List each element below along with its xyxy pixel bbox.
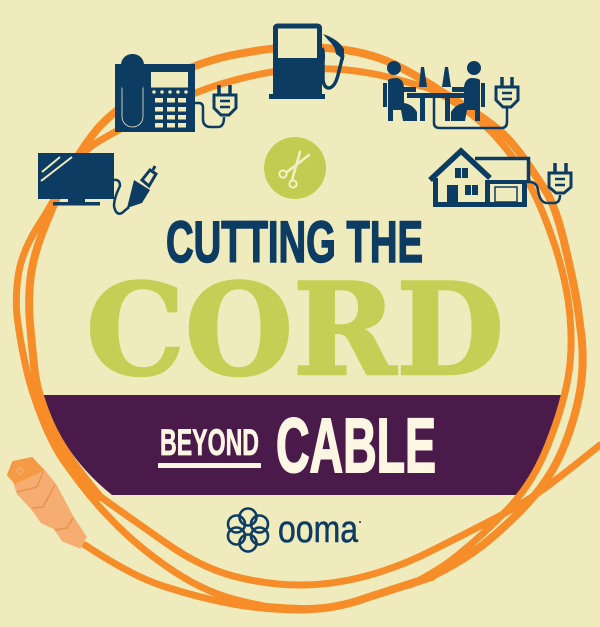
logo wordmark: ooma bbox=[278, 509, 359, 551]
icon: scissors badge bbox=[264, 137, 326, 199]
heading: cable: CABLE bbox=[276, 403, 436, 489]
icon: cable connector bbox=[8, 458, 85, 547]
icon: house plug bbox=[549, 163, 571, 193]
icon: gas pump bbox=[269, 26, 344, 99]
icon: house with garage bbox=[430, 151, 560, 207]
logo flower mark bbox=[228, 508, 268, 552]
logo: ooma bbox=[228, 508, 361, 552]
heading: cutting the: CUTTING THE bbox=[166, 210, 423, 275]
purple banner bbox=[42, 395, 562, 495]
registered mark bbox=[359, 521, 361, 523]
icon: desk phone bbox=[115, 54, 224, 132]
icon: phone plug bbox=[214, 85, 236, 115]
icon: office plug bbox=[496, 77, 518, 107]
underline under beyond bbox=[158, 463, 261, 468]
heading: cord: CORD bbox=[86, 256, 504, 404]
heading: beyond: BEYOND bbox=[160, 422, 259, 463]
icon: two people at desk bbox=[383, 61, 507, 128]
icon: television bbox=[38, 153, 156, 214]
